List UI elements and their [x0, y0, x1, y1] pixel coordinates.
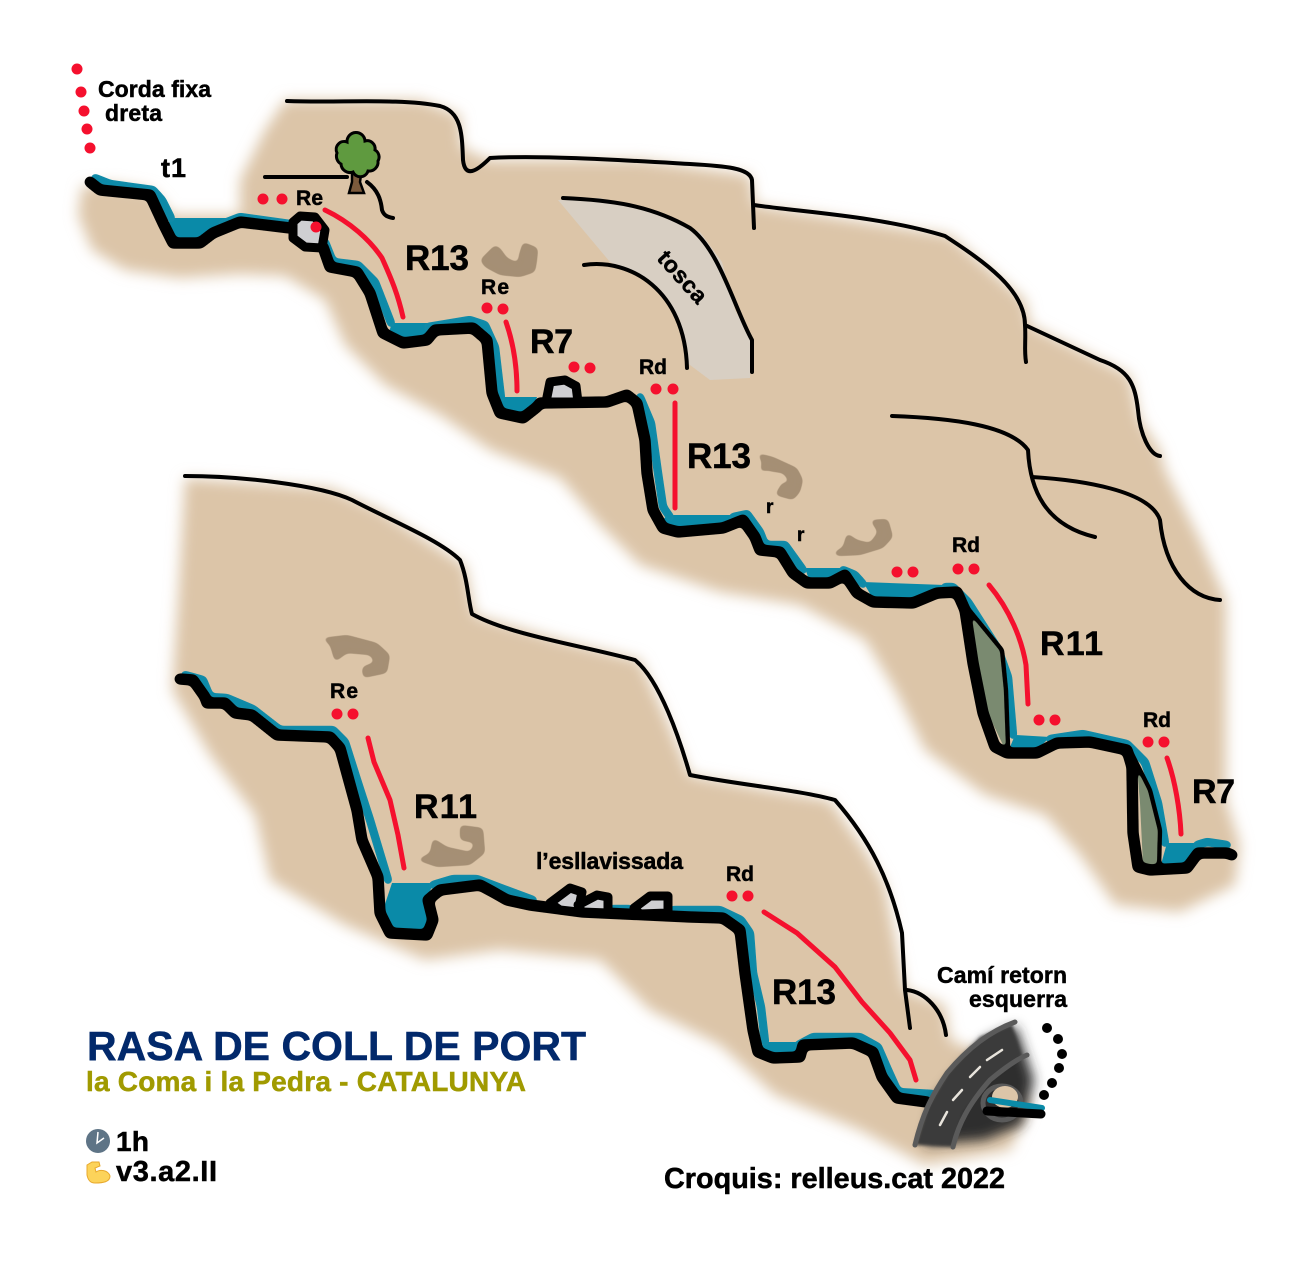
- rappel lines (red): [325, 210, 1181, 1080]
- duration: 1h: [116, 1126, 149, 1157]
- tree: [336, 132, 379, 193]
- labels on the map: R11: [414, 788, 477, 826]
- labels on the map: R7: [1192, 773, 1235, 811]
- labels on the map: l’esllavissada: [536, 848, 683, 874]
- labels on the map: Re: [296, 187, 323, 210]
- water stream: upper section: [95, 178, 1227, 845]
- labels on the map: t1: [161, 153, 186, 183]
- labels on the map: Rd: [726, 863, 754, 886]
- river bed: upper section: [90, 182, 1232, 870]
- labels on the map: r: [766, 497, 774, 518]
- labels on the map: [98, 76, 1235, 1012]
- terrain: upper section: [78, 100, 1240, 912]
- subtitle: la Coma i la Pedra - CATALUNYA: [86, 1066, 526, 1097]
- labels on the map: R7: [530, 323, 573, 361]
- tosca rock area: [558, 198, 752, 380]
- labels on the map: dreta: [105, 100, 162, 126]
- labels on the map: Camí retorn: [937, 962, 1067, 988]
- water pools: [165, 218, 1197, 1055]
- labels on the map: Rd: [1143, 709, 1171, 732]
- note: fixed rope: Corda fixa: [98, 76, 211, 102]
- labels on the map: esquerra: [969, 986, 1067, 1012]
- river bed: lower section: [180, 679, 927, 1102]
- icon: flexed biceps: [87, 1162, 110, 1183]
- canyon wall: grey-green rock faces: [972, 613, 1158, 865]
- label: tosca: tosca: [652, 245, 713, 309]
- labels on the map: Re: [330, 680, 358, 703]
- title: RASA DE COLL DE PORT: [87, 1023, 586, 1069]
- labels on the map: R13: [772, 973, 836, 1012]
- contour lines: [185, 101, 1220, 1035]
- icon: clock: [86, 1129, 110, 1153]
- rock blocks in stream: [293, 216, 668, 914]
- labels on the map: R13: [687, 437, 751, 476]
- labels on the map: r: [797, 525, 805, 546]
- road: [915, 1022, 1042, 1147]
- labels on the map: R13: [405, 239, 469, 278]
- anchor dots (red): [72, 64, 1170, 902]
- labels on the map: R11: [1040, 625, 1103, 663]
- return path dots: [1039, 1023, 1067, 1100]
- water stream: lower section: [185, 675, 933, 1094]
- terrain: lower section: [172, 478, 1030, 1165]
- labels on the map: Rd: [639, 356, 667, 379]
- credit: Croquis: relleus.cat 2022: [664, 1163, 1005, 1195]
- difficulty rating: v3.a2.II: [116, 1156, 217, 1188]
- labels on the map: Re: [481, 276, 509, 299]
- approach arrows: [322, 242, 893, 867]
- labels on the map: Rd: [952, 534, 980, 557]
